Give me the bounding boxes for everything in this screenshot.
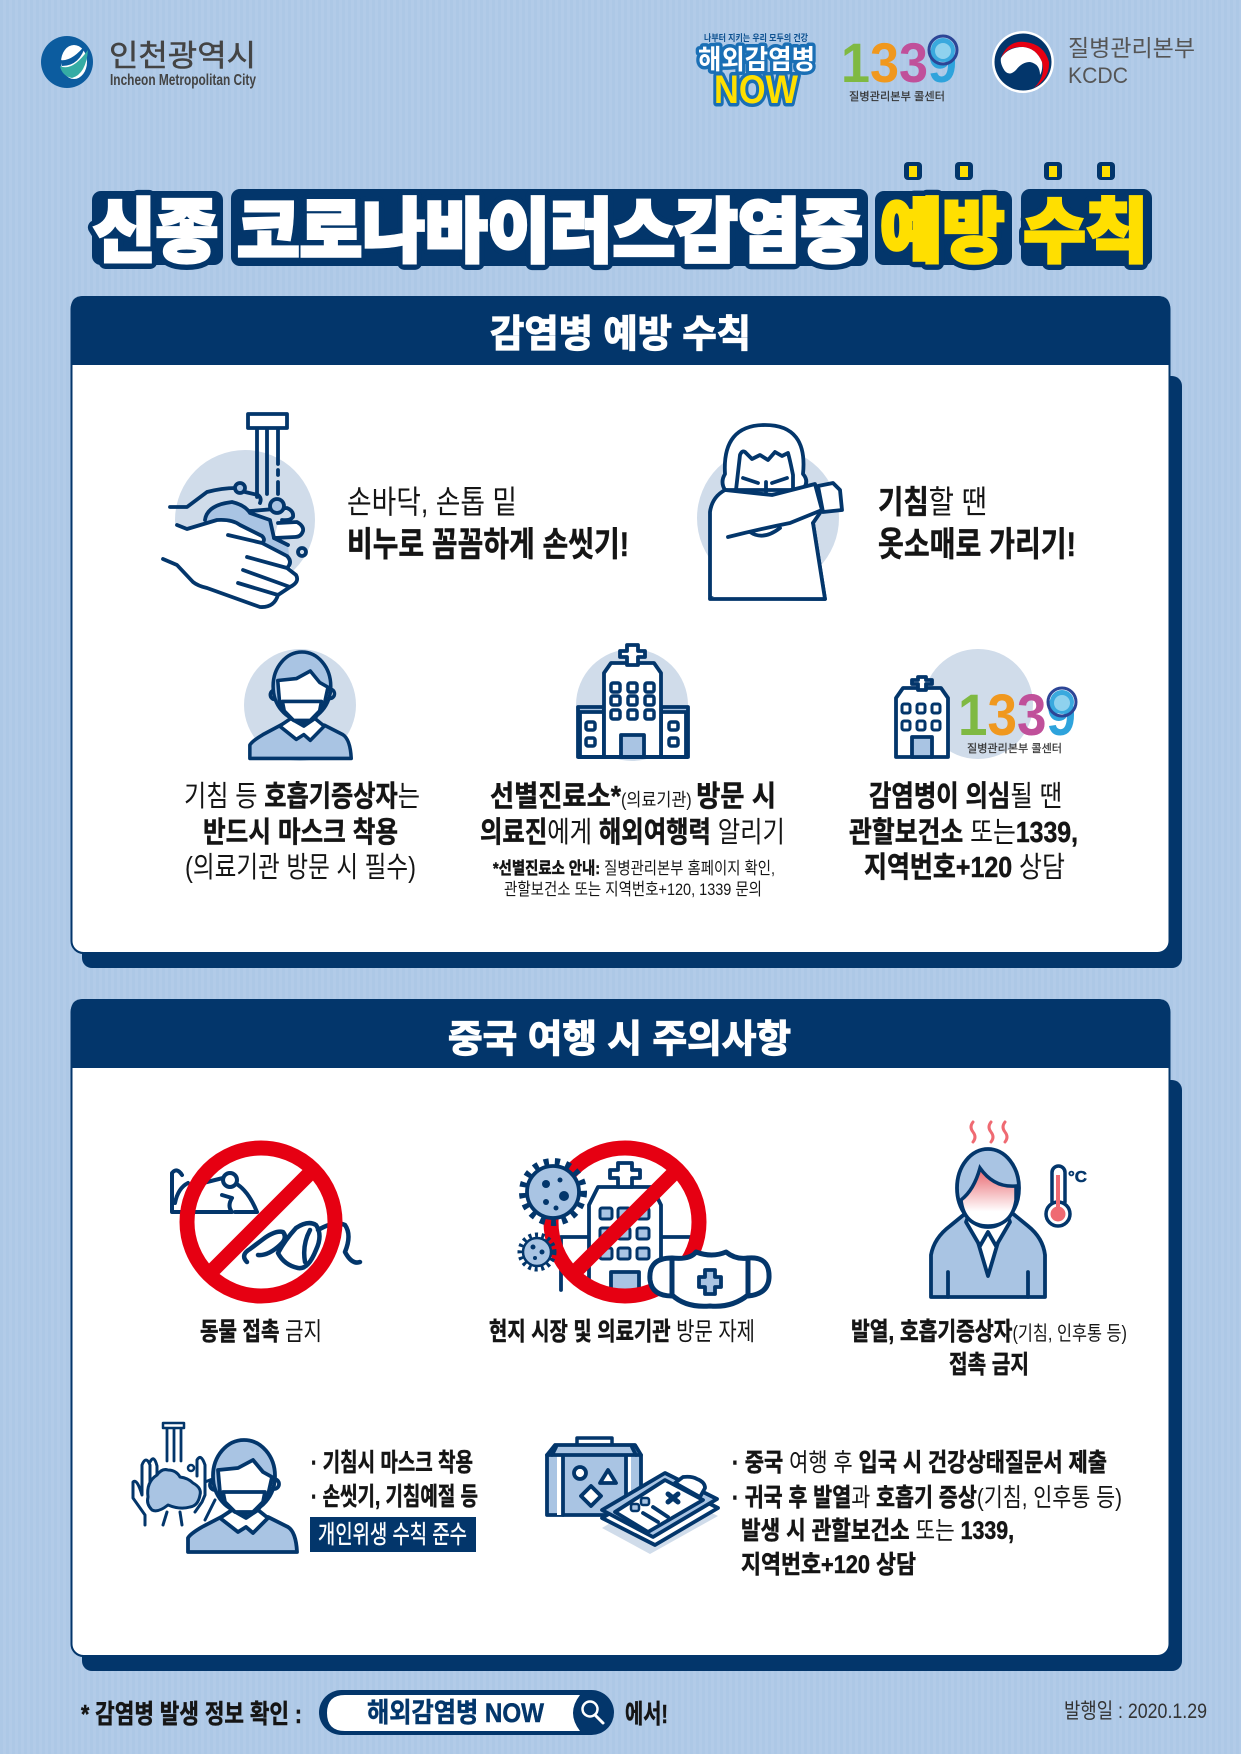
icon: face mask (650, 1252, 769, 1306)
text: consult when suspected (849, 780, 1078, 884)
icon: person with mask (244, 649, 356, 761)
panel: China travel precautions (71, 999, 1182, 1671)
footer: infection information check: 에서! (625, 1699, 668, 1729)
text: avoid febrile contacts: 접촉 금지 (949, 1351, 1029, 1379)
icon: hospital and 1339: 1339 (958, 683, 1076, 748)
logo: overseas infection NOW: 해외감염병 (698, 45, 815, 75)
logo: 1339 call center: 질병관리본부 콜센터 (849, 90, 945, 103)
text: after returning from China: · 중국 여행 후 입국 시 건강상태질문서 제출 (732, 1449, 1107, 1477)
text: cough etiquette: 기침할 땐 (878, 484, 987, 520)
text: cough etiquette: 옷소매로 가리기! (878, 526, 1076, 564)
icon: suitcase and health form (547, 1438, 718, 1554)
text: personal hygiene: · 기침시 마스크 착용 (311, 1449, 473, 1477)
text: no animal contact: 동물 접촉 금지 (200, 1318, 322, 1346)
icon: hospital (576, 645, 688, 761)
text: wear a mask: 반드시 마스크 착용 (203, 816, 398, 849)
title: 예방 수칙 (880, 193, 1148, 271)
text: after returning from China: 발생 시 관할보건소 또는 1339, (741, 1517, 1014, 1545)
text: cough etiquette (878, 484, 1076, 564)
text: screening clinic (480, 780, 785, 899)
text: personal hygiene (310, 1449, 478, 1552)
text: wear a mask: (의료기관 방문 시 필수) (185, 852, 416, 884)
text: personal hygiene: · 손씻기, 기침예절 등 (311, 1483, 478, 1511)
icon: thermometer: °C (1068, 1169, 1087, 1186)
text: screening clinic: 의료진에게 해외여행력 알리기 (480, 816, 785, 849)
text: hand washing (347, 484, 629, 564)
logo: overseas infection NOW: 나부터 지키는 우리 모두의 건강 (704, 32, 809, 43)
icon: small virus (520, 1235, 554, 1269)
icon: large virus (523, 1162, 583, 1222)
panel: infection prevention rules (71, 296, 1182, 968)
text: after returning from China (732, 1449, 1122, 1579)
footer: infection information check (81, 1690, 668, 1735)
logo: overseas infection NOW (698, 32, 815, 112)
icon: magnifier (582, 1702, 603, 1723)
search pill: 해외감염병 NOW (367, 1698, 544, 1728)
text: hand washing: 비누로 꼼꼼하게 손씻기! (347, 526, 629, 564)
callout: follow personal hygiene rules (310, 1517, 476, 1552)
logo: KCDC taegeuk: 질병관리본부 (1068, 35, 1195, 61)
title: 예방 수칙 (880, 193, 1148, 271)
text: avoid febrile contacts (851, 1318, 1127, 1379)
search pill (319, 1690, 614, 1735)
text: consult when suspected: 감염병이 의심될 땐 (869, 780, 1062, 813)
icon: hand washing (163, 414, 315, 607)
text: after returning from China: · 귀국 후 발열과 호흡기 증상(기침, 인후통 등) (732, 1484, 1122, 1512)
title (92, 162, 1152, 271)
icon: person with fever (931, 1122, 1087, 1297)
title: 신종 코로나바이러스감염증 (93, 193, 863, 271)
icon: avoid markets and medical facilities (520, 1148, 769, 1306)
logo: Incheon Metropolitan City: 인천광역시 (109, 40, 256, 73)
text: after returning from China: 지역번호+120 상담 (741, 1551, 916, 1579)
callout: follow personal hygiene rules: 개인위생 수칙 준수 (318, 1521, 467, 1549)
logo: Incheon Metropolitan City: Incheon Metropolitan City (110, 72, 256, 89)
icon: hand hygiene with mask (133, 1423, 297, 1552)
footer: infection information check: * 감염병 발생 정보 확인 : (81, 1699, 302, 1729)
text: screening clinic: 선별진료소*(의료기관) 방문 시 (490, 780, 776, 813)
text: avoid febrile contacts: 발열, 호흡기증상자(기침, 인후통 등) (851, 1318, 1127, 1346)
text: consult when suspected: 지역번호+120 상담 (864, 851, 1065, 884)
icon: no animal contact (172, 1148, 360, 1296)
text: consult when suspected: 관할보건소 또는1339, (849, 816, 1078, 849)
panel heading: China travel precautions: 중국 여행 시 주의사항 (448, 1019, 791, 1061)
panel heading: prevention rules: 감염병 예방 수칙 (490, 314, 751, 356)
logo: 1339 call center: 1339 (841, 31, 957, 94)
logo: KCDC taegeuk: KCDC (1068, 63, 1128, 88)
icon: hospital and 1339: 질병관리본부 콜센터 (967, 742, 1062, 755)
publication date: 발행일 : 2020.1.29 (1064, 1700, 1207, 1723)
icon: thermometer (1046, 1166, 1087, 1226)
icon: cough into sleeve (697, 425, 842, 599)
icon: hospital and 1339 (896, 649, 1076, 759)
title: 신종 코로나바이러스감염증 (93, 193, 863, 271)
logo: overseas infection NOW: NOW (714, 68, 798, 112)
text: screening clinic: *선별진료소 안내: 질병관리본부 홈페이지 확인, (493, 859, 775, 878)
text: wear a mask: 기침 등 호흡기증상자는 (184, 780, 420, 813)
text: avoid markets and medical facilities: 현지 시장 및 의료기관 방문 자제 (489, 1318, 755, 1346)
text: hand washing: 손바닥, 손톱 밑 (347, 484, 517, 520)
logo: KCDC taegeuk (992, 31, 1195, 93)
logo: Incheon Metropolitan City (41, 36, 256, 89)
text: wear a mask (184, 780, 420, 884)
text: screening clinic: 관할보건소 또는 지역번호+120, 1339 문의 (504, 880, 762, 899)
